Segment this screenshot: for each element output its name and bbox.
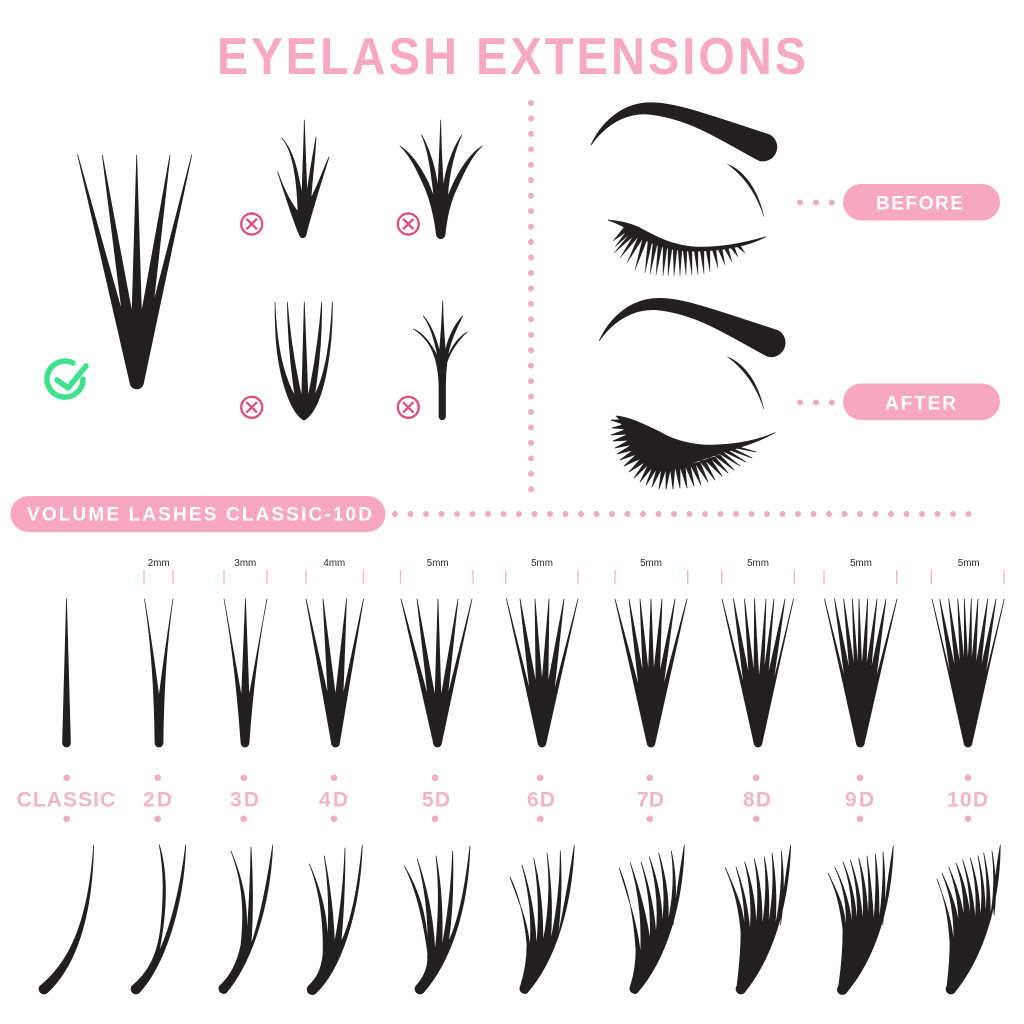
eyebrow after	[599, 298, 785, 357]
curved lash 9D	[828, 846, 893, 995]
natural lashes before	[613, 226, 745, 276]
icon: cross 4	[398, 397, 419, 418]
fan 5D front	[401, 599, 472, 747]
fan 2D front	[144, 599, 173, 747]
panel: correct and incorrect lash fans	[47, 120, 482, 420]
width labels and ticks: 5mm	[747, 558, 769, 569]
fan classic front	[62, 599, 70, 747]
icon: cross 2	[398, 214, 419, 234]
volume labels with dots: 6D	[527, 788, 555, 812]
eyebrow before	[591, 103, 777, 161]
curved lash 5D	[404, 846, 470, 994]
volume labels with dots: 5D	[422, 788, 450, 812]
volume labels with dots: 8D	[743, 788, 771, 812]
icon: cross 3	[241, 397, 262, 418]
fan 3D front	[224, 599, 267, 747]
width labels and ticks: 4mm	[323, 558, 345, 569]
curved lash 7D	[619, 845, 684, 993]
volume labels with dots: 4D	[319, 788, 348, 812]
incorrect fan: too narrow	[275, 302, 332, 420]
volume labels with dots: 7D	[637, 788, 664, 812]
curved lash 4D	[307, 845, 362, 995]
incorrect fan: uneven	[278, 120, 329, 238]
volume labels with dots: 9D	[845, 788, 874, 812]
incorrect fan: long stem	[413, 301, 467, 420]
fan 4D front	[306, 599, 364, 747]
volume labels with dots: 10D	[947, 788, 988, 812]
fan 8D front	[722, 599, 794, 747]
incorrect fan: curled out	[400, 120, 482, 239]
volume labels with dots: 2D	[143, 788, 172, 812]
width labels and ticks: 5mm	[427, 558, 449, 569]
front-view lash fans classic to 10D	[62, 599, 1004, 747]
curved lash 8D	[725, 845, 791, 994]
title: EYELASH EXTENSIONS	[217, 28, 809, 86]
icon: green check	[47, 361, 86, 397]
callout: after	[797, 384, 1000, 420]
volume labels with dots: CLASSIC	[17, 788, 115, 812]
callout: before	[797, 184, 1000, 220]
width labels and ticks: 2mm	[148, 558, 170, 569]
fan 6D front	[506, 599, 578, 747]
lash extensions after	[611, 420, 756, 489]
callout: after: AFTER	[885, 394, 956, 414]
eyelid and lash mass after	[616, 416, 775, 467]
callout: before: BEFORE	[876, 194, 963, 214]
correct lash fan	[78, 155, 192, 389]
curved lash 6D	[510, 845, 574, 993]
panel: before eye	[591, 103, 777, 276]
section heading: volume lashes: VOLUME LASHES CLASSIC-10D	[27, 504, 372, 526]
curved lash 10D	[937, 845, 1000, 994]
width labels and ticks: 5mm	[958, 558, 980, 569]
fan 7D front	[615, 599, 687, 747]
width labels and ticks	[144, 558, 1004, 584]
width labels and ticks: 3mm	[234, 558, 256, 569]
section heading: volume lashes	[10, 496, 386, 532]
eyelid crease after	[727, 357, 764, 409]
icon: cross 1	[241, 214, 262, 234]
panel: after eye	[599, 298, 785, 489]
curved lash classic	[39, 845, 94, 994]
width labels and ticks: 5mm	[850, 558, 872, 569]
fan 10D front	[932, 599, 1004, 747]
width labels and ticks: 5mm	[531, 558, 553, 569]
curved lash 2D	[131, 845, 186, 994]
side-view curved lashes classic to 10D	[39, 845, 1000, 995]
width labels and ticks: 5mm	[640, 558, 662, 569]
volume labels with dots: 3D	[230, 788, 259, 812]
eyelid before	[608, 220, 766, 251]
eyelid crease before	[727, 164, 764, 217]
volume labels with dots	[17, 774, 988, 822]
curved lash 3D	[219, 845, 273, 993]
fan 9D front	[824, 599, 897, 747]
